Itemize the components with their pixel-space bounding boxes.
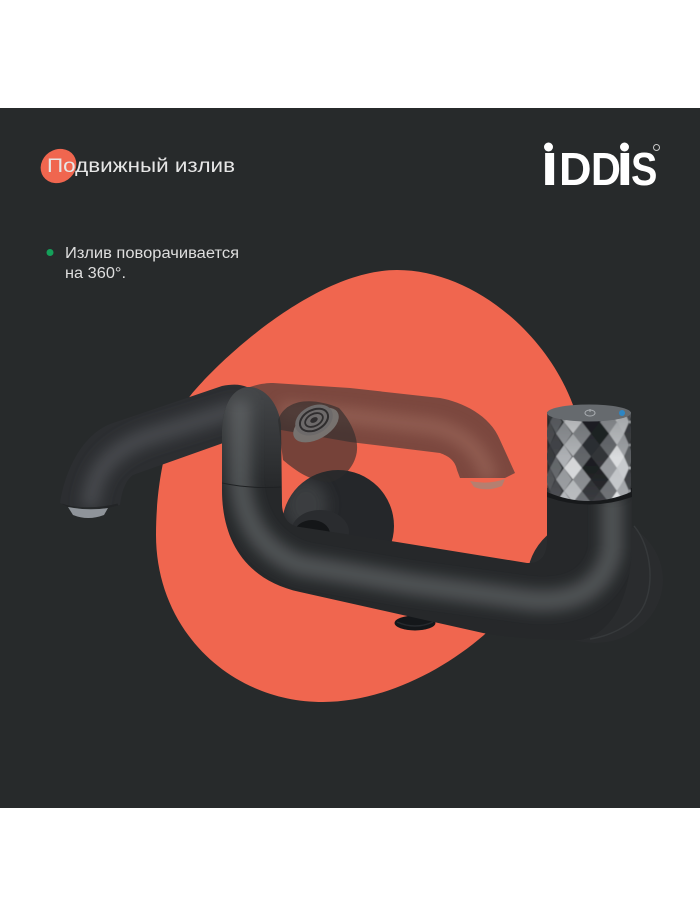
translucent round base around aerator bbox=[278, 401, 357, 482]
bullet dot bbox=[46, 249, 54, 256]
logo: IDDIS: D bbox=[559, 144, 592, 195]
logo: IDDIS: D bbox=[591, 144, 621, 196]
translucent upper bend bbox=[222, 387, 281, 490]
ghost spout, translucent bbox=[250, 383, 515, 490]
knob diamond cylinder bbox=[547, 412, 631, 501]
knob top face bbox=[547, 404, 631, 422]
logo: IDDIS: S bbox=[631, 144, 657, 196]
left aerator bbox=[68, 507, 108, 518]
knob with diamond pattern bbox=[547, 404, 632, 504]
logo: IDDIS: I bbox=[541, 144, 558, 195]
knob collar bbox=[547, 488, 632, 504]
orange blob background bbox=[156, 270, 580, 702]
power icon bbox=[585, 409, 595, 416]
aerator detail bbox=[287, 398, 345, 450]
right wall disc bbox=[527, 517, 663, 643]
logo: IDDIS: I bbox=[616, 144, 633, 195]
faucet illustration bbox=[68, 383, 651, 640]
dark background panel bbox=[0, 108, 700, 808]
centre wall disc bbox=[284, 470, 394, 542]
bullet text: Излив поворачивается bbox=[65, 245, 239, 262]
logo: IDDIS bbox=[541, 142, 660, 196]
title text: Подвижный излив bbox=[47, 155, 235, 177]
bottom nub bbox=[394, 616, 436, 630]
left rotated spout bbox=[68, 384, 247, 518]
bullet text block bbox=[46, 245, 239, 282]
bullet text: на 360°. bbox=[65, 265, 126, 282]
ghost aerator bbox=[470, 479, 505, 489]
title accent blob bbox=[34, 142, 83, 190]
blue indicator bbox=[619, 410, 625, 416]
main spout tube bbox=[222, 387, 628, 634]
heading: title with accent bbox=[34, 142, 235, 190]
